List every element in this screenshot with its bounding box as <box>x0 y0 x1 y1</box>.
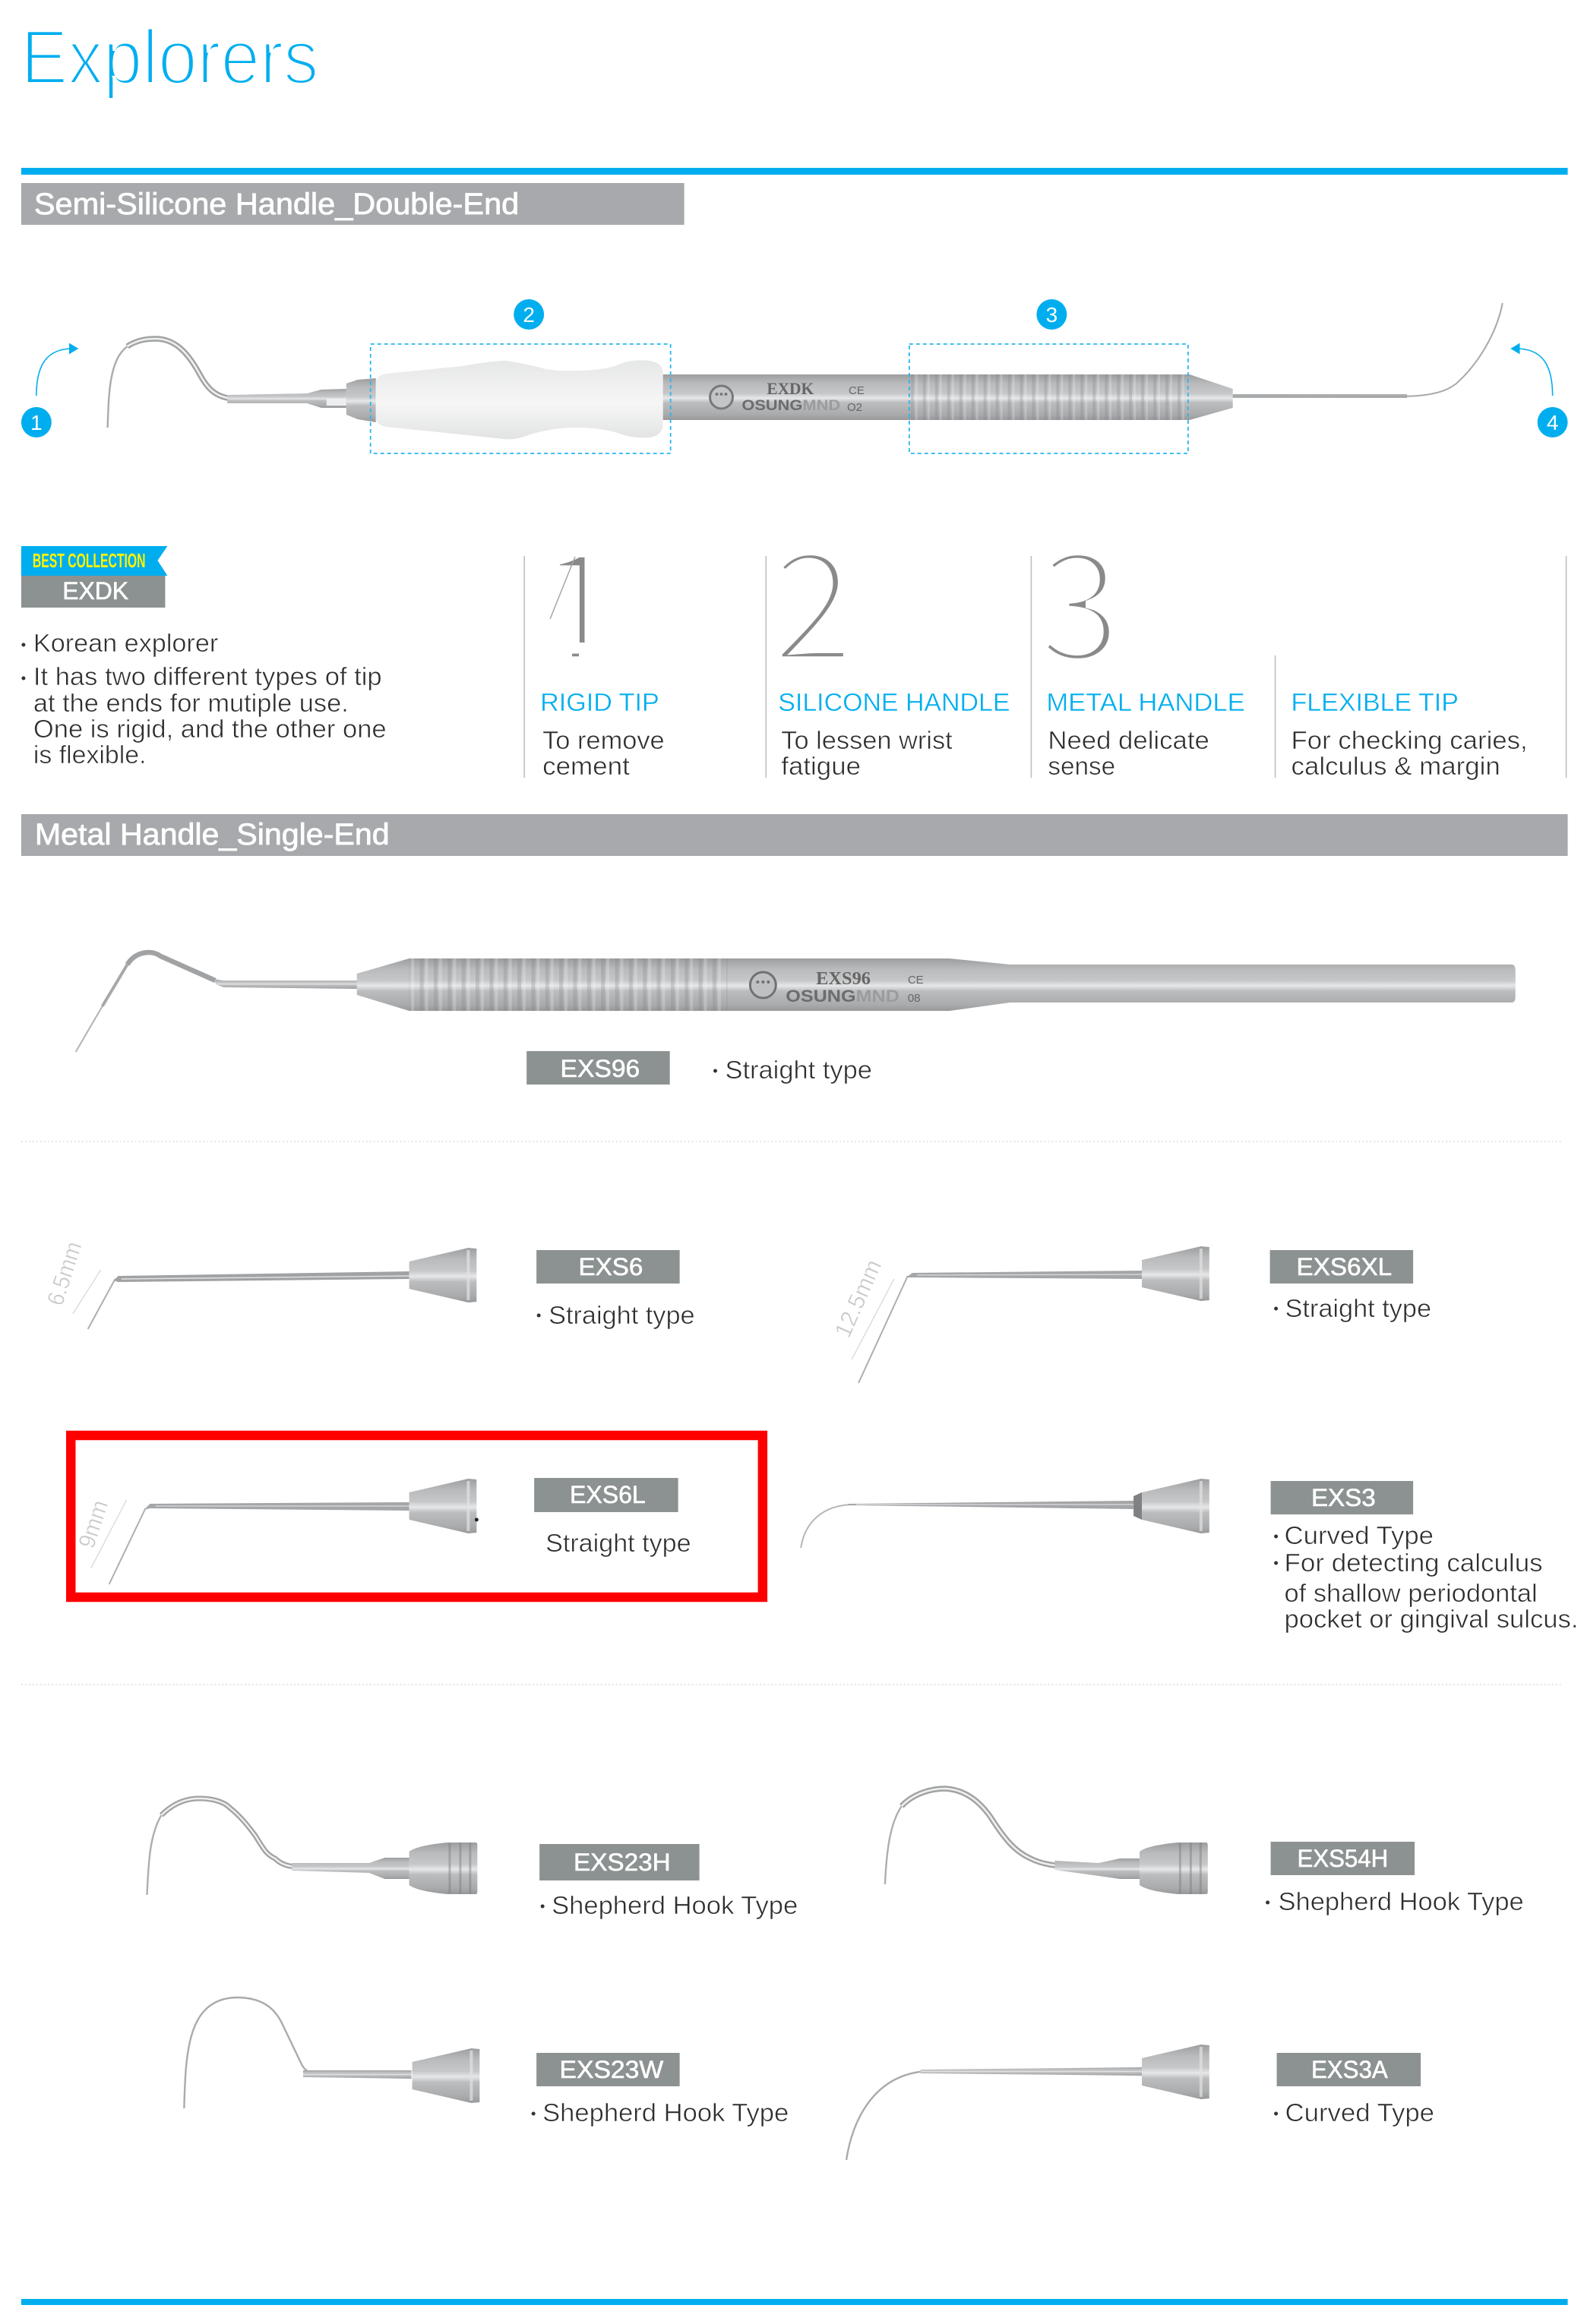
instrument: EXS23W <box>184 1997 479 2108</box>
heading: semi-silicone handle <box>21 183 685 225</box>
instrument: EXDK double-end <box>108 303 1503 439</box>
tag: EXS54H <box>1271 1842 1415 1875</box>
badge 2: 2 <box>523 303 535 327</box>
heading: semi-silicone handle: Semi-Silicone Handle_Double-End <box>34 188 519 221</box>
instrument: EXS96 <box>76 952 1516 1052</box>
callout box: metal handle <box>909 344 1188 453</box>
ribbon: best collection <box>21 546 167 576</box>
feature: silicone handle <box>778 688 1010 780</box>
instrument: EXS6 <box>88 1248 476 1329</box>
arrow 4 <box>1512 344 1553 396</box>
note: EXS3 <box>1274 1521 1579 1633</box>
note: EXS23W: Shepherd Hook Type <box>542 2098 789 2127</box>
tag: EXS3 <box>1271 1481 1413 1514</box>
numeral 3: 3 <box>1038 486 1122 705</box>
bottom rule <box>21 2299 1568 2305</box>
feature: flexible tip: For checking caries, <box>1292 726 1528 754</box>
note: EXS3A: Curved Type <box>1285 2098 1434 2127</box>
feature: rigid tip: cement <box>542 752 630 780</box>
ribbon: best collection: BEST COLLECTION <box>33 549 145 572</box>
instrument: EXS54H <box>885 1789 1208 1894</box>
title: Explorers <box>21 15 318 100</box>
tag: EXS6L: EXS6L <box>570 1481 646 1508</box>
tag: EXS6 <box>536 1250 680 1284</box>
tag: EXS3A <box>1277 2053 1421 2086</box>
dimension: 9mm: 9mm <box>73 1497 113 1552</box>
tag: EXS23W: EXS23W <box>560 2056 664 2083</box>
feature: metal handle <box>1046 688 1245 780</box>
note: EXS3: pocket or gingival sulcus. <box>1285 1605 1579 1633</box>
numeral 1: 1 <box>537 486 621 705</box>
dimension: 9mm <box>73 1497 127 1568</box>
instrument: EXS96: OSUNG MND <box>786 987 899 1006</box>
badge 3 <box>1036 299 1067 330</box>
feature: silicone handle: fatigue <box>781 752 861 780</box>
feature: flexible tip: FLEXIBLE TIP <box>1292 688 1459 716</box>
note: EXS3: For detecting calculus <box>1285 1549 1543 1577</box>
tag: EXS96 <box>526 1051 670 1085</box>
feature: rigid tip: RIGID TIP <box>540 688 659 716</box>
feature: metal handle: METAL HANDLE <box>1046 688 1245 716</box>
description: EXDK: One is rigid, and the other one <box>33 715 387 743</box>
badge 4 <box>1538 407 1568 437</box>
note: EXS6L: Straight type <box>545 1529 691 1557</box>
feature: silicone handle: SILICONE HANDLE <box>778 688 1010 716</box>
tag: EXS6L <box>534 1478 678 1512</box>
note: EXS23H: Shepherd Hook Type <box>552 1891 798 1919</box>
tag: EXS6XL <box>1270 1250 1413 1284</box>
highlight box: EXS6L <box>71 1435 763 1597</box>
feature: metal handle: sense <box>1048 752 1115 780</box>
badge 3: 3 <box>1046 303 1058 327</box>
badge 1 <box>21 407 52 437</box>
tag: EXS54H: EXS54H <box>1297 1845 1388 1872</box>
note: EXS6: Straight type <box>549 1301 695 1329</box>
instrument: EXDK double-end: CE <box>849 384 865 397</box>
instrument: EXS96: 08 <box>908 992 920 1005</box>
note: EXS96: Straight type <box>725 1056 872 1084</box>
tag: EXS23H: EXS23H <box>574 1849 671 1876</box>
tag: EXS96: EXS96 <box>561 1055 640 1082</box>
note: EXS54H: Shepherd Hook Type <box>1279 1887 1524 1915</box>
instrument: EXDK double-end: OSUNG MND <box>741 398 840 414</box>
arrow 1 <box>36 344 77 396</box>
feature: metal handle: Need delicate <box>1048 726 1209 754</box>
tag: EXS6XL: EXS6XL <box>1296 1253 1392 1280</box>
description: EXDK: Korean explorer <box>33 629 218 657</box>
instrument: EXS23H <box>147 1798 477 1895</box>
description: EXDK <box>21 629 387 769</box>
tag: EXS3A: EXS3A <box>1311 2056 1388 2083</box>
badge 1: 1 <box>30 411 43 434</box>
instrument: EXS96: EXS96 <box>816 969 871 989</box>
dotted divider <box>21 1684 1561 1685</box>
feature: rigid tip: To remove <box>542 726 665 754</box>
note: EXS3: of shallow periodontal <box>1285 1579 1538 1607</box>
badge 4: 4 <box>1547 411 1558 434</box>
dimension: 12.5mm: 12.5mm <box>830 1255 887 1341</box>
instrument: EXDK double-end: O2 <box>847 401 862 414</box>
feature dividers <box>524 556 1567 778</box>
instrument: EXS3 <box>801 1479 1209 1548</box>
model tag: EXDK <box>21 576 165 608</box>
tag: EXS23H <box>539 1844 700 1880</box>
instrument: EXS3A <box>846 2045 1209 2160</box>
instrument: EXS6L <box>109 1479 479 1584</box>
note: EXS3: Curved Type <box>1285 1521 1434 1549</box>
tag: EXS3: EXS3 <box>1311 1484 1376 1511</box>
feature: flexible tip <box>1292 688 1528 780</box>
note: EXS6XL: Straight type <box>1285 1294 1431 1322</box>
feature: rigid tip <box>540 688 665 780</box>
feature: silicone handle: To lessen wrist <box>781 726 953 754</box>
top rule <box>21 168 1568 175</box>
instrument: EXS96: CE <box>908 974 924 987</box>
instrument: EXDK double-end: EXDK <box>767 379 814 398</box>
badge 2 <box>514 299 544 330</box>
heading: metal handle <box>21 814 1568 856</box>
description: EXDK: is flexible. <box>33 740 146 769</box>
instrument: EXS6XL <box>858 1246 1209 1383</box>
feature: flexible tip: calculus & margin <box>1292 752 1500 780</box>
dimension: 6.5mm: 6.5mm <box>42 1238 87 1309</box>
description: EXDK: at the ends for mutiple use. <box>33 689 349 717</box>
callout box: silicone handle <box>371 344 671 453</box>
numeral 2: 2 <box>771 486 855 705</box>
dotted divider <box>21 1141 1561 1142</box>
description: EXDK: It has two different types of tip <box>33 662 382 690</box>
heading: metal handle: Metal Handle_Single-End <box>35 818 390 851</box>
model tag: EXDK: EXDK <box>62 577 128 605</box>
tag: EXS6: EXS6 <box>578 1253 643 1280</box>
tag: EXS23W <box>536 2053 680 2086</box>
